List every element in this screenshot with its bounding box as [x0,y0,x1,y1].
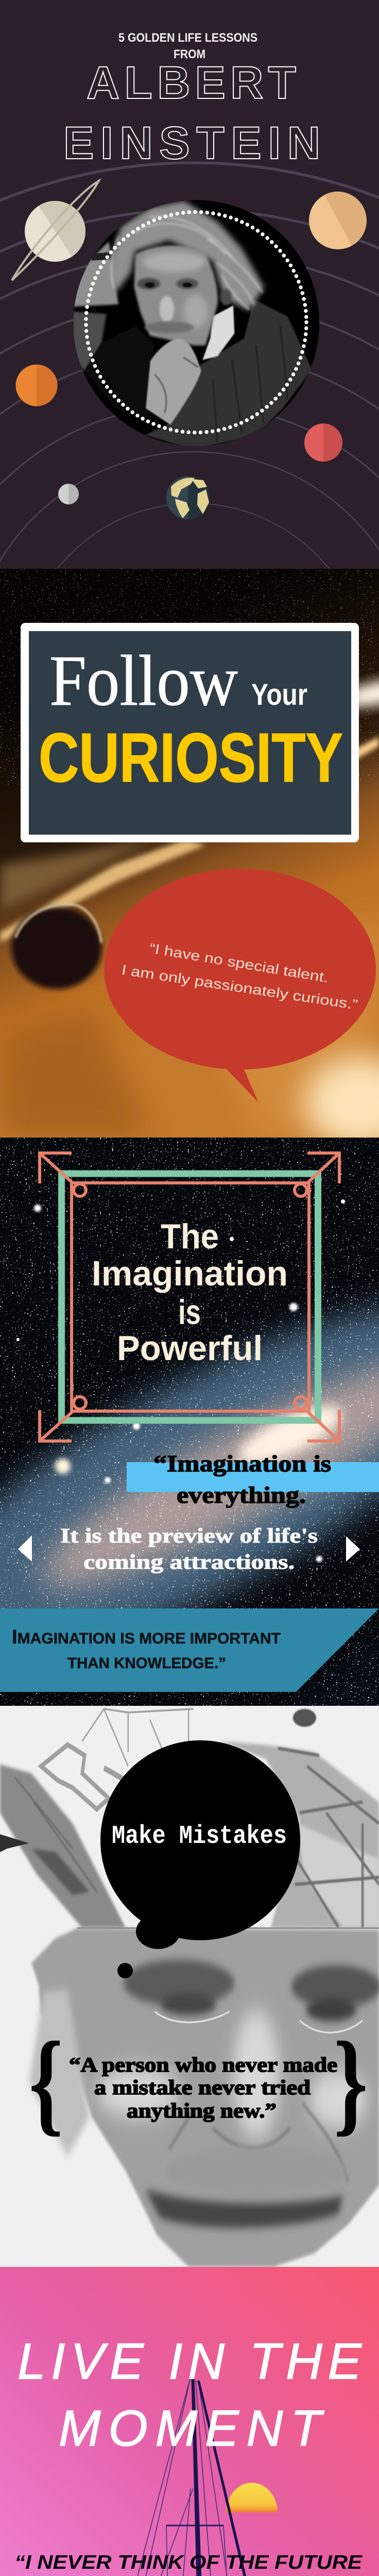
portrait: forehead highlight [143,252,205,272]
face: right eye [300,1998,363,2032]
panel: title and solar system [0,0,379,569]
heading: the imagination is powerful: Imagination [92,1254,288,1293]
quote: person who never made a mistake: “A person who never made [69,2053,337,2076]
face: moustache [166,2148,347,2194]
quote: imagination is everything: everything. [177,1482,306,1508]
sailboat: spreader [166,2524,223,2527]
thought bubble [100,1740,300,1949]
quote: preview of life: It is the preview of life's [60,1524,318,1547]
portrait: left arm [84,326,154,423]
frame: salmon rectangle and corners [40,1153,339,1441]
planet: red [304,423,342,462]
arrow: right [346,1536,360,1562]
title card [21,623,359,842]
speech bubble [104,869,376,1103]
quote: person who never made a mistake: a mistake never tried [94,2076,311,2099]
portrait: face [134,245,218,345]
face: mouth shadow [145,2189,343,2228]
quote: more important than knowledge [12,1626,281,1672]
sailboat [80,2370,286,2576]
heading: the imagination is powerful: The [161,1217,219,1256]
face: left brow shadow [123,1960,234,2006]
face: right brow shadow [291,1965,379,2008]
sketch: letters and scaffold [41,1709,194,1809]
heading: 5 golden life lessons: 5 GOLDEN LIFE LESSONS [118,31,257,45]
portrait: hand shading [154,358,198,413]
planet: dark moon [11,904,102,989]
portrait: left eye [137,278,160,290]
quote: imagination is everything: “Imagination is [153,1450,331,1477]
quote: imagination is everything [153,1450,331,1508]
portrait: hair strands [112,216,262,309]
face: base [31,1928,379,2267]
sailboat: forestay [197,2381,272,2576]
sailboat: mast [191,2370,205,2576]
arrow: left [18,1535,32,1562]
quote: more important than knowledge: THAN KNOWLEDGE.” [67,1655,226,1672]
quote: passionately curious: “I have no special talent. [148,940,330,986]
portrait: hand [146,338,201,425]
background: orange bands and flares [0,674,379,1149]
quote: preview of life: coming attractions. [83,1550,295,1573]
sketch: rocket pen [0,1765,126,1928]
face: hair tuft [29,1988,90,2157]
heading: moment: MOMENT [59,2400,324,2456]
portrait: sweater ribs [213,326,288,442]
quote: person who never made a mistake [69,2053,337,2122]
sailboat: rigging [110,2375,242,2576]
left brace: { [29,2019,63,2147]
speech bubble: I am only passionately curious.” [120,962,358,1012]
heading: Albert: ALBERT [87,57,296,108]
quote: preview of life [60,1524,318,1573]
heading: the imagination is powerful: Powerful [117,1329,263,1368]
background: galaxy [0,1238,379,1730]
blue band [127,1462,379,1492]
planet: Earth [166,476,210,519]
portrait: bookshelf background [73,242,118,371]
face: nose and cheeks [97,2010,367,2139]
heading: from: FROM [174,47,205,61]
portrait: right eye [176,278,198,289]
teal ribbon [0,1608,379,1692]
portrait: collar [202,306,234,360]
heading: Einstein: EINSTEIN [63,117,320,168]
heading: Follow: Follow [49,641,238,721]
frame: green rectangle [62,1174,318,1420]
portrait: moustache [145,321,194,333]
face: nose crease lines [169,2103,348,2182]
panel: live in the moment [0,2267,379,2576]
illustration: sketched objects and face [0,1709,379,2267]
panel: follow your curiosity [0,569,379,1149]
panel: make mistakes [0,1706,379,2267]
quote: never think of the future: “I NEVER THINK OF THE FUTURE [14,2552,363,2573]
right brace: } [334,2019,368,2147]
portrait: Einstein thinking [73,200,319,449]
portrait: sweater [145,299,312,449]
planet: moon [58,484,79,504]
quote: more important than knowledge: IMAGINATION IS MORE IMPORTANT [12,1626,281,1648]
portrait: hair mass [108,201,264,310]
sketch: sailing ship [219,1709,379,1928]
portrait: cheek highlight [184,295,208,329]
planet: peach [309,192,367,249]
quote: person who never made a mistake: anything new.” [127,2099,277,2122]
panel: imagination is powerful [0,1138,379,1730]
heading: live in the: LIVE IN THE [18,2333,363,2389]
planet: Saturn [12,181,99,280]
heading: the imagination is powerful [92,1217,288,1368]
portrait: nose [160,296,174,323]
face: top cut line [77,1927,379,1929]
bright stars [16,1199,345,1562]
face: left eye [154,1994,230,2022]
portrait: ear [220,289,232,305]
sun [226,2483,278,2513]
orbit rings [0,161,379,569]
planet: orange [15,365,58,406]
heading: make mistakes: Make Mistakes [112,1822,287,1851]
heading: the imagination is powerful: is [178,1293,201,1332]
portrait: dotted ring [86,212,306,433]
heading: Your: Your [251,678,307,711]
thought dot [117,1963,133,1978]
